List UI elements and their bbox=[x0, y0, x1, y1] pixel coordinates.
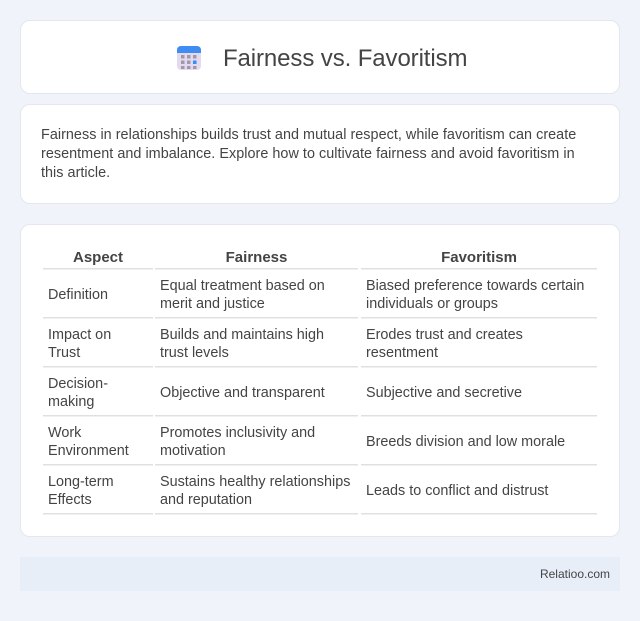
footer text: Relatioo.com bbox=[540, 567, 610, 581]
title: Fairness vs. Favoritism bbox=[223, 45, 467, 72]
text block: introduction: resentment and imbalance. Explore how to cultivate fairness and avoid favoritism in bbox=[41, 146, 575, 162]
row: Work Environment bbox=[48, 425, 565, 459]
row: Impact on Trust: Impact on bbox=[48, 327, 111, 343]
row: Impact on Trust: Erodes trust and creates bbox=[366, 327, 523, 343]
row: Decision-making bbox=[48, 376, 522, 410]
row: Work Environment: motivation bbox=[160, 443, 226, 459]
panel: introduction bbox=[20, 104, 620, 204]
row: Impact on Trust: Builds and maintains high bbox=[160, 327, 324, 343]
row: Long-term Effects: Long-term bbox=[48, 474, 114, 490]
row: Long-term Effects: and reputation bbox=[160, 492, 252, 508]
row: Definition: Equal treatment based on bbox=[160, 278, 325, 294]
panel: comparison table bbox=[20, 224, 620, 537]
row: Decision-making: making bbox=[48, 394, 94, 410]
row: Decision-making: Decision- bbox=[48, 376, 108, 392]
table header: Fairness: Fairness bbox=[226, 249, 287, 266]
row: Impact on Trust: resentment bbox=[366, 345, 438, 361]
row: Long-term Effects bbox=[48, 474, 548, 508]
table header: Favoritism: Favoritism bbox=[441, 249, 517, 266]
row: Decision-making: Objective and transparent bbox=[160, 385, 325, 401]
icon: calendar bbox=[177, 46, 201, 70]
footer bar bbox=[20, 557, 620, 591]
text block: introduction bbox=[41, 127, 576, 181]
row: Decision-making: Subjective and secretive bbox=[366, 385, 522, 401]
row: Impact on Trust bbox=[48, 327, 523, 361]
row: Work Environment: Breeds division and low morale bbox=[366, 434, 565, 450]
text block: introduction: Fairness in relationships builds trust and mutual respect, while favoritism can create bbox=[41, 127, 576, 143]
row: Work Environment: Work bbox=[48, 425, 81, 441]
row: Definition: Biased preference towards certain bbox=[366, 278, 584, 294]
row: Work Environment: Environment bbox=[48, 443, 129, 459]
row: Work Environment: Promotes inclusivity and bbox=[160, 425, 315, 441]
row: Impact on Trust: Trust bbox=[48, 345, 80, 361]
table header: Aspect: Aspect bbox=[73, 249, 123, 266]
row: Long-term Effects: Effects bbox=[48, 492, 92, 508]
row: Impact on Trust: trust levels bbox=[160, 345, 229, 361]
row: Definition: individuals or groups bbox=[366, 296, 498, 312]
row: Definition: merit and justice bbox=[160, 296, 265, 312]
panel: title card bbox=[20, 20, 620, 94]
row: Definition bbox=[48, 278, 584, 312]
row: Definition: Definition bbox=[48, 287, 108, 303]
row: Long-term Effects: Leads to conflict and distrust bbox=[366, 483, 548, 499]
row: Long-term Effects: Sustains healthy relationships bbox=[160, 474, 350, 490]
text block: introduction: this article. bbox=[41, 165, 110, 181]
